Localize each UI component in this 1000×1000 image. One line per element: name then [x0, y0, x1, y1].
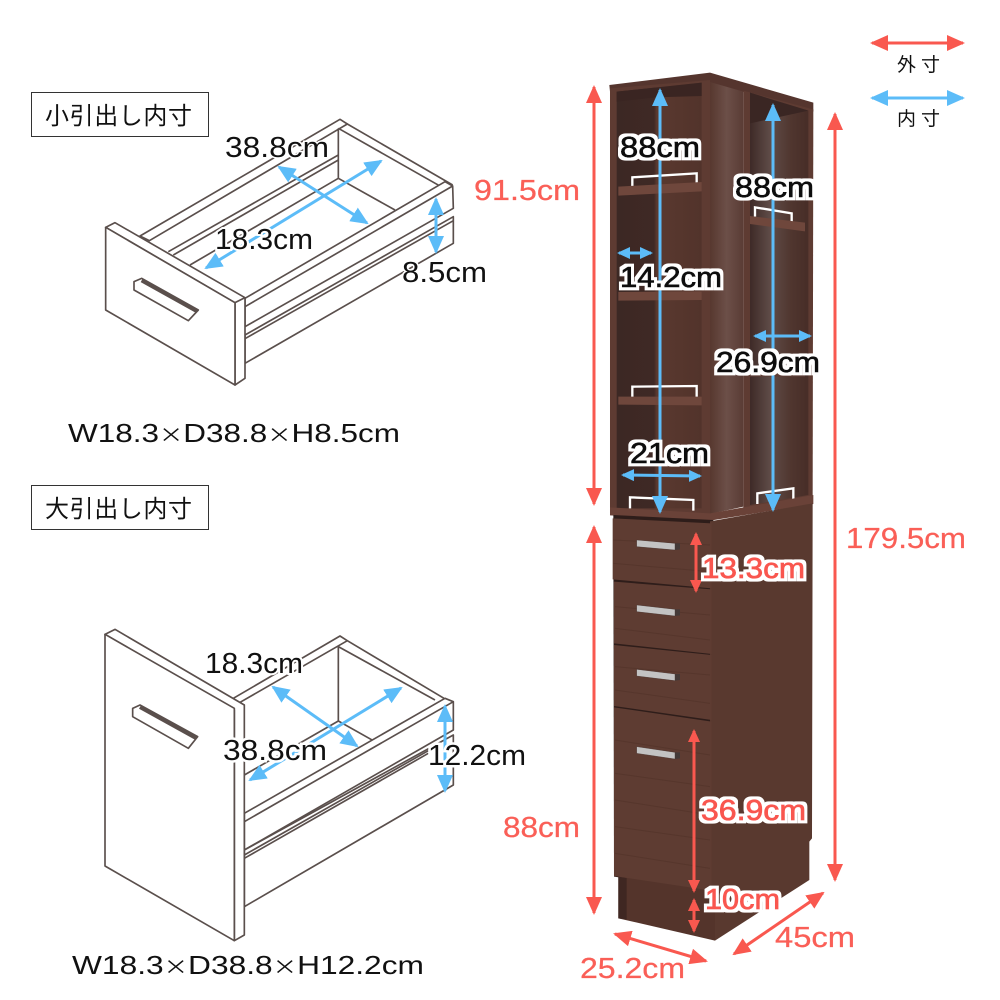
handles: [637, 540, 680, 759]
arrow: upper height: [592, 87, 596, 504]
legend arrow: outer dimension: [872, 42, 963, 44]
arrow: lower height: [592, 527, 596, 913]
arrow: bay height right: [772, 105, 774, 510]
cabinet top board: [609, 73, 813, 112]
label: small drawer height: 8.5cm: [402, 257, 487, 289]
cabinet side: [710, 503, 813, 941]
cabinet right bay interior: [750, 93, 808, 505]
heading: small drawer inner dimensions: [32, 92, 208, 136]
legend label: outer: 外寸: [897, 54, 940, 76]
arrow: door height: [692, 731, 696, 891]
illustration: large drawer: [105, 629, 453, 941]
arrow: bay height left: [658, 90, 662, 512]
label: plinth height: 10cm: [705, 884, 780, 916]
label: lower height: 88cm: [503, 812, 580, 844]
cabinet left bay frame: [610, 80, 710, 515]
illustration: small drawer: [106, 119, 453, 385]
drawer 2: [614, 582, 712, 654]
arrow: plinth height: [692, 900, 696, 931]
drawer backing: [613, 515, 713, 892]
arrow: bay depth 26.9: [755, 334, 810, 338]
arrow: small drawer height: [434, 199, 438, 252]
label: drawer height: 13.3cm: [702, 553, 805, 585]
illustration: tall cabinet lower drawers and door: [613, 503, 813, 941]
drawer 3: [614, 645, 712, 720]
arrow: depth: [734, 893, 823, 954]
heading: large drawer inner dimensions: [32, 486, 208, 530]
arrow: width: [615, 934, 706, 961]
arrow: large drawer depth: [250, 688, 401, 780]
arrow: small drawer width: [206, 161, 381, 268]
spec: small drawer size: W18.3 ×D38.8 ×H8.5cm: [68, 418, 400, 448]
spec: large drawer size: W18.3 ×D38.8 ×H12.2cm: [72, 950, 424, 980]
legend: outer and inner dimensions: [872, 43, 963, 130]
arrow: small drawer depth: [279, 167, 367, 223]
wood grain: [613, 540, 710, 868]
label: bay width 21: 21cm: [630, 438, 709, 470]
label: small drawer width: 18.3cm: [215, 224, 313, 256]
heading: large drawer inner dimensions: 大引出し内寸: [45, 496, 192, 523]
legend label: inner: 内寸: [897, 108, 940, 130]
label: large drawer width: 18.3cm: [205, 648, 303, 680]
cabinet side panel: [710, 82, 743, 514]
label: door height: 36.9cm: [701, 795, 806, 827]
label: width: 25.2cm: [580, 953, 685, 985]
label: upper height: 91.5cm: [474, 175, 580, 207]
legend arrow: inner dimension: [872, 96, 963, 100]
arrow: large drawer width: [273, 687, 357, 746]
label: large drawer height: 12.2cm: [428, 740, 526, 772]
left bay wire racks and shelves: [618, 173, 702, 511]
arrow: large drawer height: [444, 706, 446, 791]
door: [614, 707, 712, 891]
arrow: total height: [834, 114, 836, 880]
label: small drawer depth: 38.8cm: [225, 132, 329, 164]
label: total height: 179.5cm: [846, 523, 966, 555]
drawer 1: [613, 518, 712, 588]
arrow: drawer height: [694, 534, 698, 591]
label: depth: 45cm: [775, 922, 855, 954]
plinth: [618, 876, 715, 941]
label: large drawer depth: 38.8cm: [223, 735, 327, 767]
label: bay width 14.2: 14.2cm: [620, 262, 722, 294]
cabinet middle board: [610, 495, 813, 521]
label: bay height left: 88cm: [620, 132, 700, 164]
arrow: bay width 14.2: [619, 252, 651, 254]
right bay wire racks and shelves: [750, 207, 805, 504]
cabinet right bay frame: [743, 91, 813, 508]
heading: small drawer inner dimensions: 小引出し内寸: [45, 103, 192, 130]
illustration: tall cabinet upper shelves: [609, 73, 813, 521]
label: bay height right: 88cm: [735, 172, 814, 204]
label: bay depth 26.9: 26.9cm: [716, 347, 820, 379]
cabinet left bay interior: [617, 83, 702, 508]
arrow: bay width 21: [623, 475, 700, 476]
